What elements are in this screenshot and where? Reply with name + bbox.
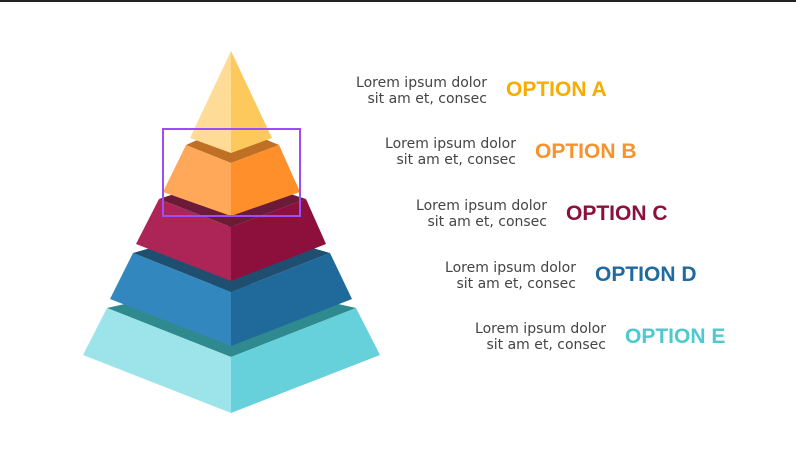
text C: sit am et, consec <box>427 214 547 230</box>
layer E <box>83 280 380 413</box>
layer D <box>110 225 352 346</box>
text A <box>356 75 487 107</box>
text B <box>385 136 516 168</box>
highlight box <box>163 129 300 216</box>
option C: OPTION C <box>566 202 668 225</box>
text C <box>416 198 547 230</box>
option D: OPTION D <box>595 263 697 286</box>
text D: sit am et, consec <box>456 276 576 292</box>
text D: Lorem ipsum dolor <box>445 260 576 276</box>
layer C <box>136 175 326 281</box>
text A: sit am et, consec <box>367 91 487 107</box>
text E: sit am et, consec <box>486 337 606 353</box>
text C: Lorem ipsum dolor <box>416 198 547 214</box>
text B: sit am et, consec <box>396 152 516 168</box>
option B: OPTION B <box>535 140 637 163</box>
text A: Lorem ipsum dolor <box>356 75 487 91</box>
option E: OPTION E <box>625 325 725 348</box>
layer B <box>163 125 300 216</box>
option A: OPTION A <box>506 78 607 101</box>
layer A <box>190 51 272 153</box>
text D <box>445 260 576 292</box>
text B: Lorem ipsum dolor <box>385 136 516 152</box>
text E <box>475 321 606 353</box>
text E: Lorem ipsum dolor <box>475 321 606 337</box>
